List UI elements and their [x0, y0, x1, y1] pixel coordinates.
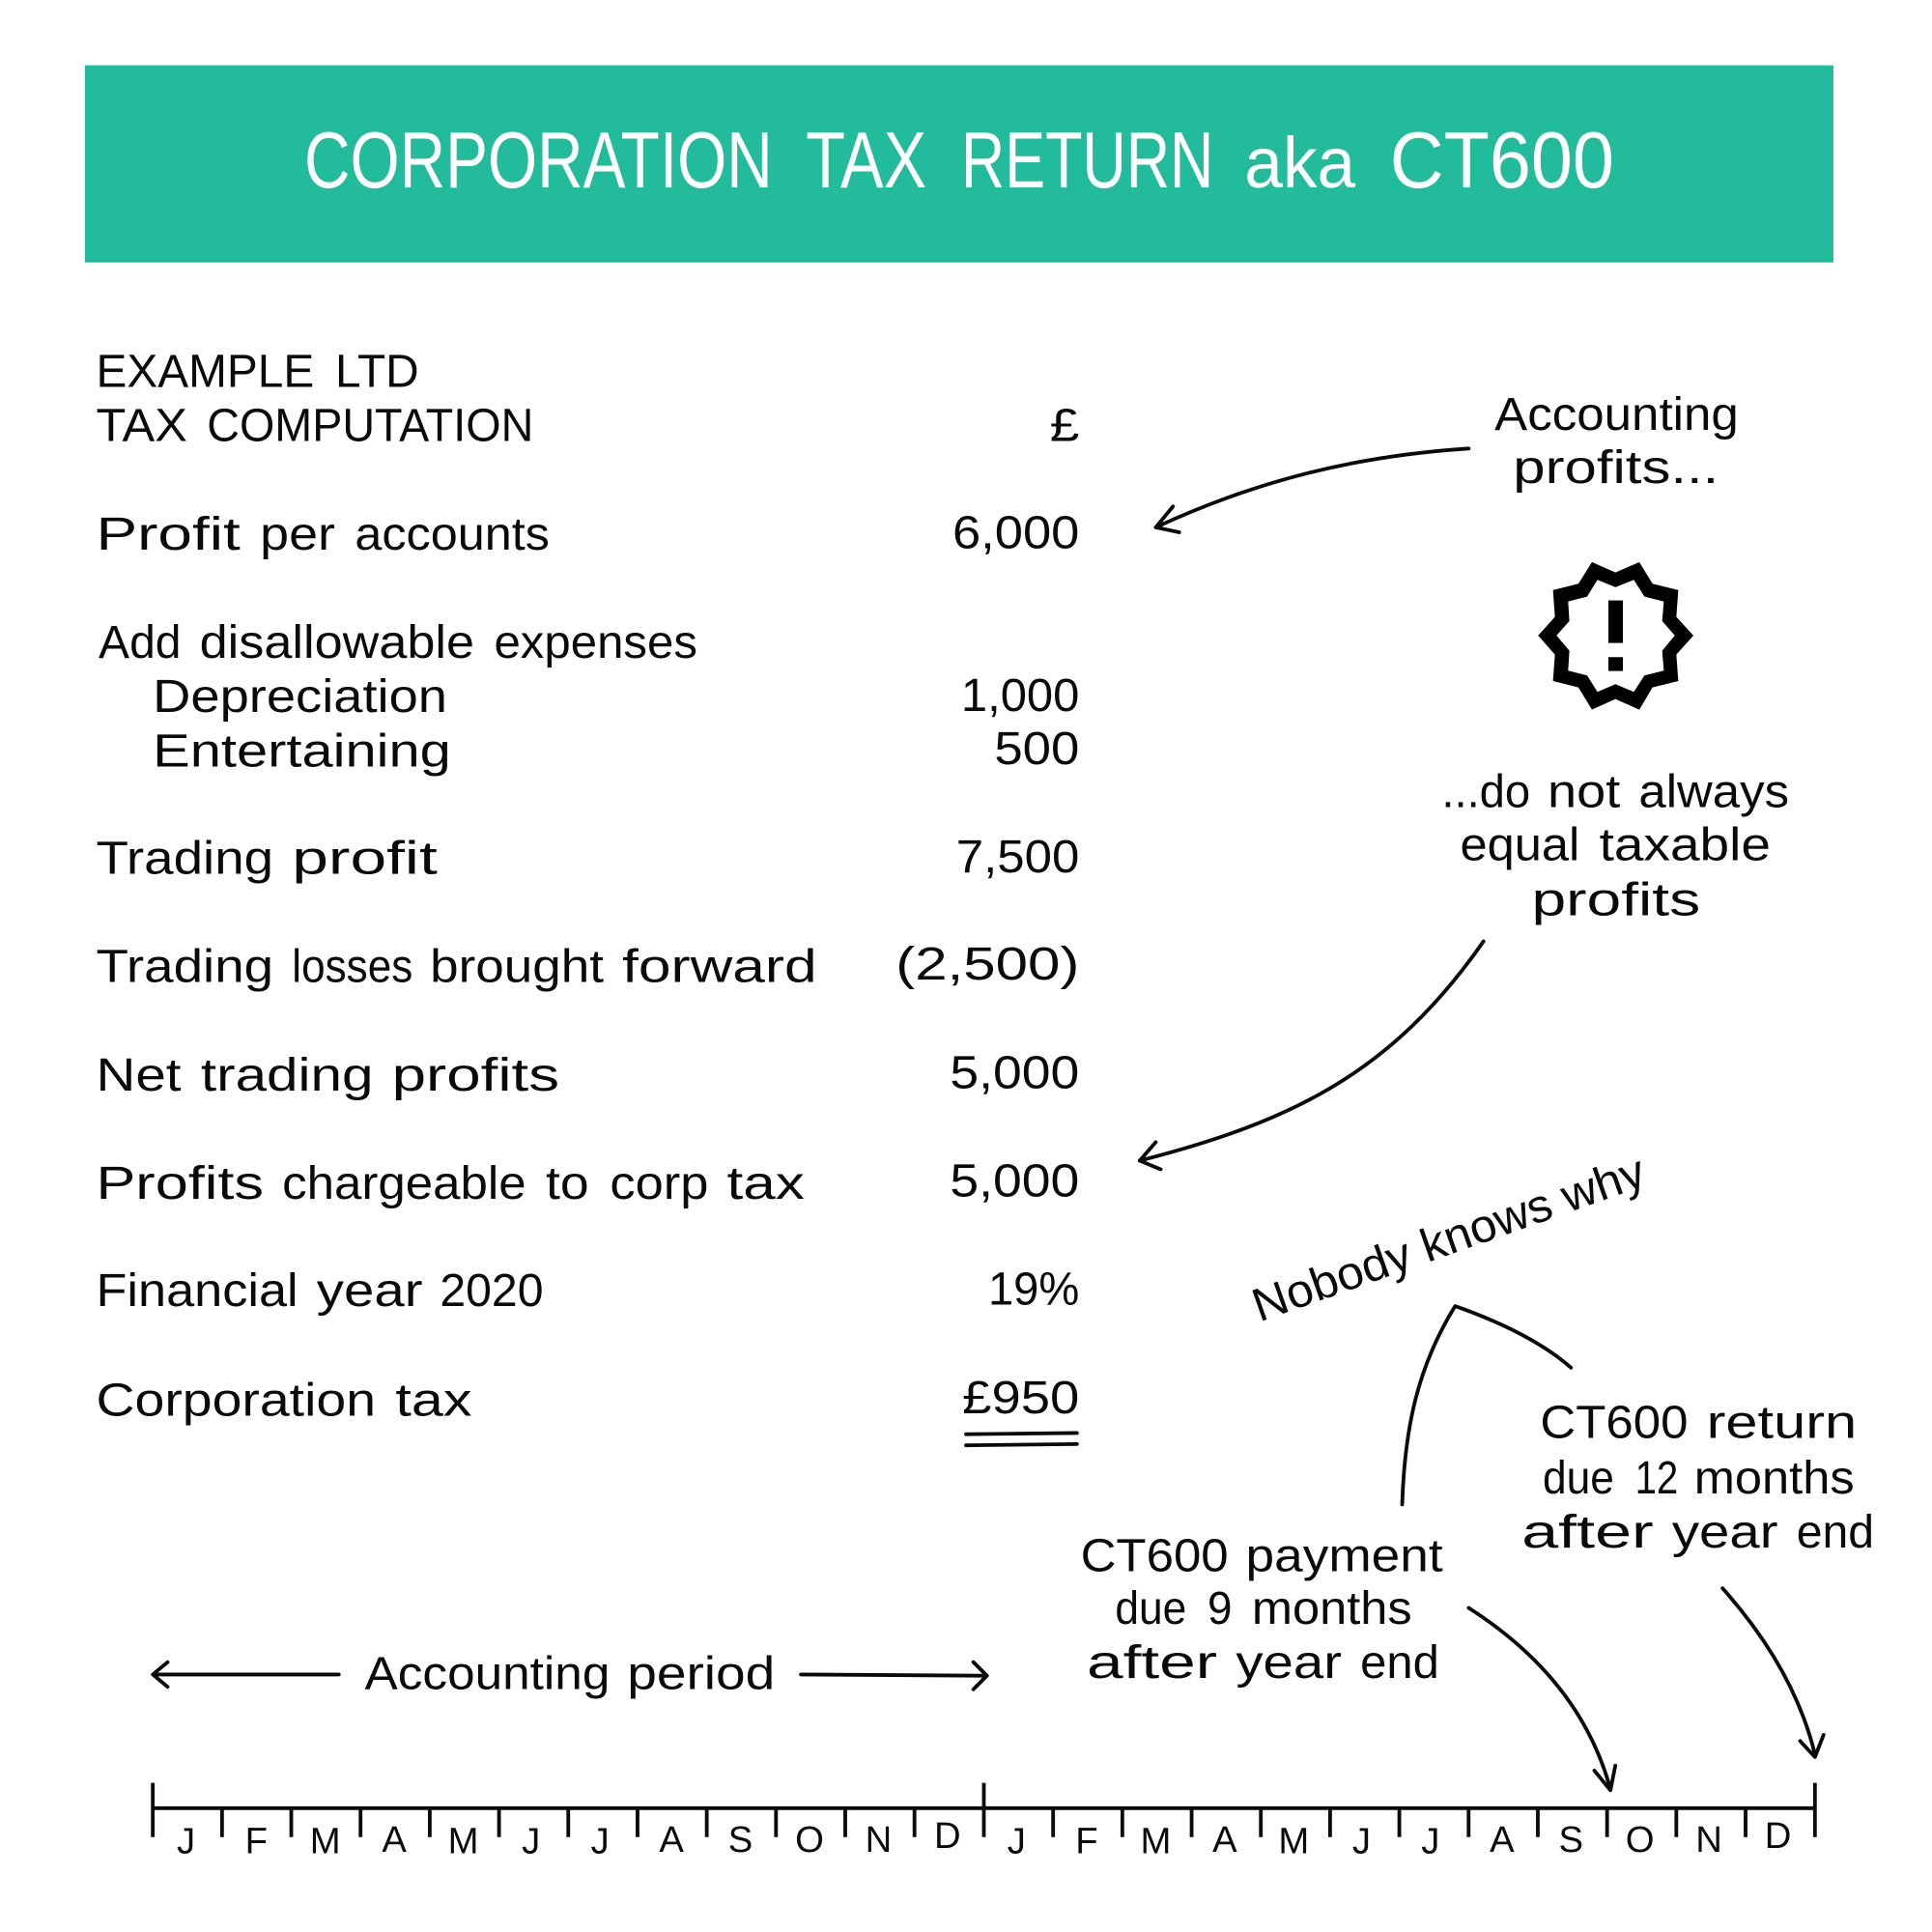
row: add disallowable expenses: disallowable — [200, 616, 474, 668]
arrow: return to timeline — [1722, 1588, 1824, 1757]
callout: do not always equal: equal — [1460, 818, 1579, 870]
heading: tax computation: COMPUTATION — [207, 400, 533, 452]
value: 6,000: 6,000 — [952, 507, 1079, 559]
callout: accounting profits — [1494, 388, 1739, 494]
callout: return due: after — [1521, 1506, 1654, 1558]
value: 1,000: 1,000 — [961, 669, 1079, 722]
month labels: O — [795, 1819, 824, 1861]
callout: payment due: months — [1252, 1582, 1412, 1634]
callout: return due: months — [1694, 1452, 1855, 1504]
value: 5,000 net: 5,000 — [950, 1046, 1079, 1098]
title: CT600 — [1390, 115, 1614, 205]
row: profit per accounts — [96, 508, 550, 560]
title banner — [85, 66, 1833, 263]
timeline axis and ticks — [153, 1783, 1815, 1837]
month labels: A — [1212, 1819, 1237, 1861]
row: financial year: Financial — [96, 1264, 298, 1317]
callout: payment due: after — [1087, 1636, 1217, 1689]
callout: do not always equal: taxable — [1600, 818, 1771, 870]
value: total: £950 — [962, 1372, 1079, 1424]
timeline — [153, 1783, 1815, 1861]
month labels: M — [448, 1820, 479, 1861]
callout: do not always equal: always — [1638, 765, 1789, 817]
arrow: to profits chargeable — [1140, 941, 1484, 1169]
month labels: J — [591, 1820, 610, 1861]
row: corporation tax: Corporation — [96, 1375, 376, 1427]
month labels: O — [1626, 1819, 1655, 1861]
callout: do not always equal: ...do — [1441, 765, 1530, 817]
callout: return due: return — [1707, 1397, 1857, 1449]
month labels: M — [1278, 1820, 1309, 1861]
row: trading losses: brought — [430, 941, 605, 993]
month labels: J — [1421, 1820, 1439, 1861]
title: RETURN — [961, 115, 1213, 205]
month labels: N — [866, 1819, 892, 1861]
row: net trading profits — [96, 1049, 559, 1101]
callout: payment due: payment — [1246, 1529, 1443, 1581]
row: net trading profits: Net — [96, 1049, 182, 1101]
month labels: A — [1490, 1819, 1515, 1861]
callout: payment due: due — [1115, 1582, 1186, 1634]
row: profits chargeable: tax — [727, 1157, 805, 1209]
row: financial year: 2020 — [440, 1264, 543, 1317]
row: add disallowable expenses: expenses — [494, 616, 697, 668]
month labels: D — [1765, 1815, 1791, 1857]
callout: do not always equal: not — [1548, 765, 1621, 817]
month labels — [177, 1815, 1791, 1861]
callout: return due: CT600 — [1540, 1397, 1688, 1449]
row: profits chargeable: corp — [610, 1157, 708, 1209]
heading: tax computation: TAX — [96, 400, 187, 452]
icon: warning badge — [1538, 562, 1693, 710]
accounting period label — [365, 1648, 775, 1700]
arrow: period left — [153, 1662, 339, 1687]
callout: nobody knows why: Nobody knows why — [1245, 1145, 1653, 1332]
bracket lines to nobody knows why — [1403, 1306, 1571, 1504]
row: trading losses: Trading — [96, 941, 273, 993]
callout: payment due: CT600 — [1081, 1529, 1229, 1581]
row: profits chargeable — [96, 1157, 805, 1209]
row: entertaining: Entertaining — [153, 724, 451, 777]
callout: do not always equal — [1441, 765, 1789, 926]
callout: do not always equal: profits — [1531, 874, 1700, 926]
month labels: J — [177, 1820, 195, 1861]
value: 5,000 chargeable: 5,000 — [950, 1155, 1079, 1208]
month labels: D — [934, 1815, 961, 1857]
title: CORPORATION — [304, 115, 773, 205]
row: profit per accounts: per — [260, 508, 335, 560]
row: net trading profits: trading — [201, 1049, 373, 1101]
month labels: J — [1008, 1820, 1026, 1861]
callout: return due: end — [1797, 1506, 1874, 1558]
arrow: to profit per accounts — [1155, 448, 1468, 532]
value: 500: 500 — [994, 723, 1079, 775]
row: trading losses: forward — [622, 941, 817, 993]
callout: accounting profits: Accounting — [1494, 388, 1739, 440]
arrow: period right — [801, 1662, 987, 1690]
month labels: F — [1075, 1820, 1098, 1861]
month labels: N — [1695, 1819, 1722, 1861]
callout: payment due — [1081, 1529, 1443, 1689]
accounting period label: Accounting — [365, 1648, 610, 1700]
currency column heading: £ — [1050, 400, 1079, 452]
row: corporation tax: tax — [395, 1375, 472, 1427]
month labels: F — [245, 1820, 268, 1861]
callout: accounting profits: profits... — [1513, 441, 1719, 494]
callout: return due: year — [1672, 1506, 1778, 1558]
heading: company: LTD — [335, 346, 419, 398]
row: profit per accounts: Profit — [96, 508, 241, 560]
accounting period label: period — [627, 1648, 775, 1700]
tax computation table — [96, 346, 1079, 1445]
month labels: S — [1559, 1819, 1583, 1861]
month labels: J — [522, 1820, 540, 1861]
month labels: A — [659, 1819, 684, 1861]
value: 19%: 19% — [988, 1264, 1079, 1316]
heading: company — [96, 346, 419, 398]
callout: return due: 12 — [1635, 1452, 1678, 1504]
month labels: A — [382, 1819, 407, 1861]
month labels: M — [310, 1820, 341, 1861]
double underline — [966, 1433, 1077, 1445]
row: net trading profits: profits — [392, 1049, 559, 1101]
row: corporation tax — [96, 1375, 472, 1427]
callout: payment due: end — [1360, 1636, 1439, 1689]
callout: return due: due — [1543, 1452, 1614, 1504]
month labels: S — [728, 1819, 753, 1861]
title: aka — [1244, 123, 1356, 203]
row: add disallowable expenses: Add — [99, 616, 182, 668]
row: profit per accounts: accounts — [355, 508, 550, 560]
title: TAX — [806, 115, 926, 205]
row: profits chargeable: chargeable — [282, 1157, 526, 1209]
callout: payment due: year — [1236, 1636, 1342, 1689]
value: (2,500): (2,500) — [895, 938, 1079, 990]
heading: company: EXAMPLE — [96, 346, 314, 398]
row: financial year — [96, 1264, 544, 1317]
row: trading losses: losses — [292, 941, 412, 993]
row: financial year: year — [317, 1264, 423, 1317]
row: profits chargeable: Profits — [96, 1157, 264, 1209]
row: trading losses — [96, 941, 817, 993]
row: trading profit — [96, 832, 439, 884]
month labels: J — [1352, 1820, 1371, 1861]
row: trading profit: Trading — [96, 832, 273, 884]
callout: return due — [1521, 1397, 1874, 1558]
month labels: M — [1140, 1820, 1171, 1861]
row: profits chargeable: to — [546, 1157, 589, 1209]
callout: payment due: 9 — [1208, 1582, 1233, 1634]
row: depreciation: Depreciation — [153, 670, 447, 723]
title — [304, 115, 1614, 205]
row: add disallowable expenses — [99, 616, 697, 668]
row: trading profit: profit — [292, 832, 439, 884]
arrow: payment to timeline — [1468, 1608, 1615, 1790]
value: 7,500: 7,500 — [956, 831, 1079, 883]
